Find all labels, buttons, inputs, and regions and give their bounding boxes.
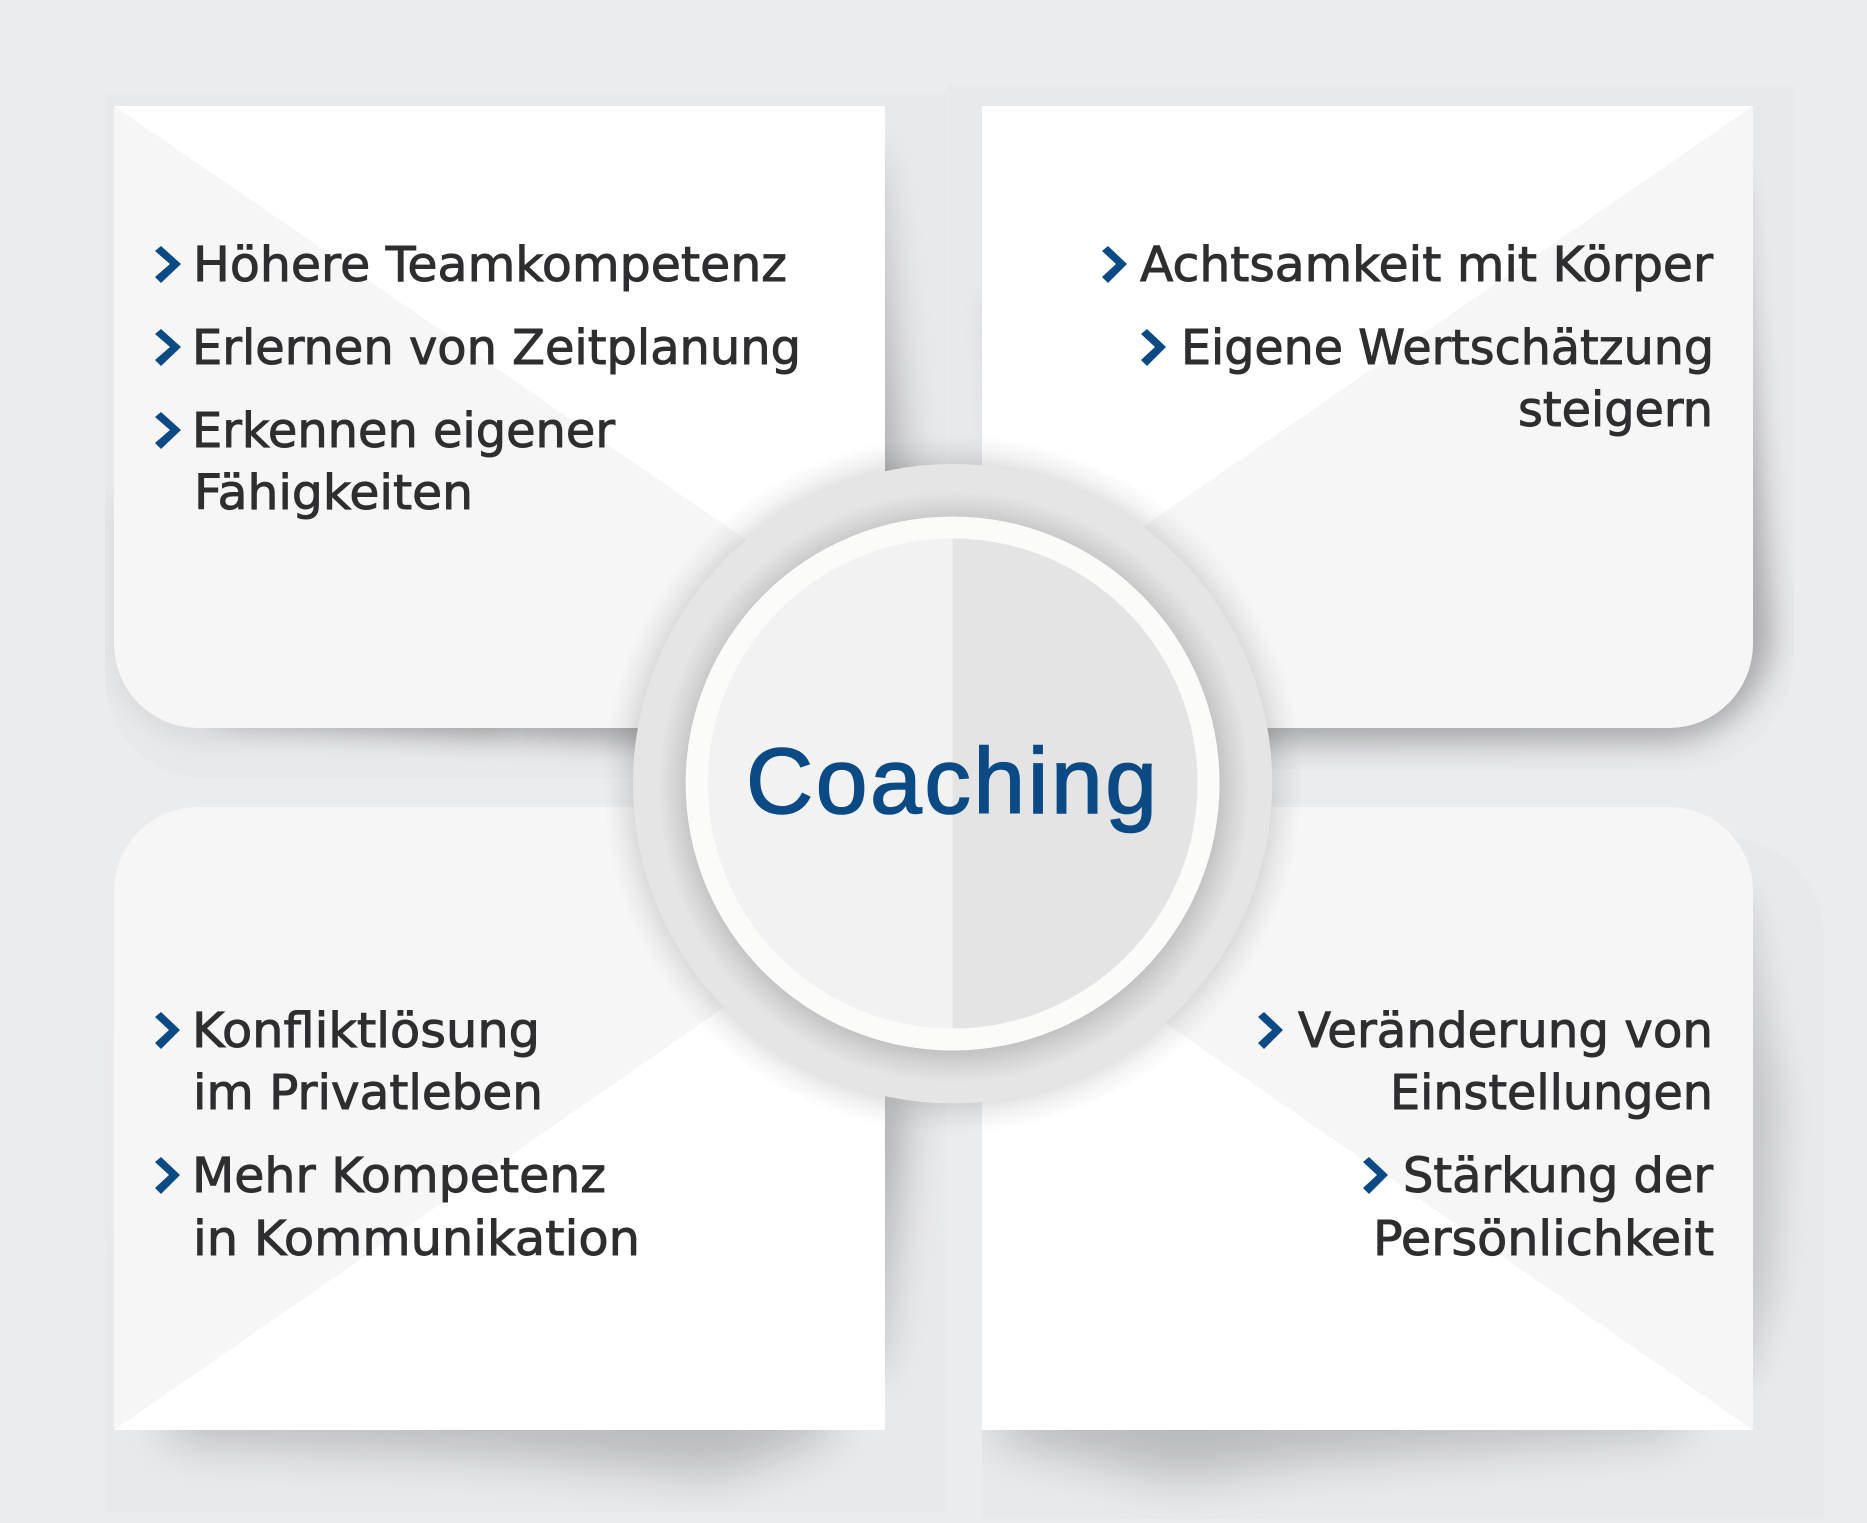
list item: Eigene Wertschätzung steigern: steigern	[1518, 382, 1713, 438]
central circle	[603, 434, 1303, 1134]
list item: Veränderung von Einstellungen: Veränderung von	[1298, 1003, 1713, 1059]
card shape top right	[982, 106, 1753, 728]
panel: top right	[982, 106, 1753, 728]
list item: Eigene Wertschätzung steigern	[1141, 320, 1714, 438]
inner disc left half	[708, 538, 952, 1028]
list item: Eigene Wertschätzung steigern: Eigene Wertschätzung	[1181, 320, 1714, 376]
list item: Stärkung der Persönlichkeit: Stärkung der	[1403, 1148, 1713, 1204]
list item: Konfliktlösung im Privatleben: im Privatleben	[193, 1065, 543, 1121]
circle outer glow	[603, 434, 1303, 1134]
list item: Erlernen von Zeitplanung: Erlernen von Zeitplanung	[192, 320, 801, 376]
list item: Mehr Kompetenz in Kommunikation: Mehr Kompetenz	[192, 1148, 606, 1204]
list item: Achtsamkeit mit Körper: Achtsamkeit mit Körper	[1140, 237, 1713, 293]
list item: Erkennen eigener Fähigkeiten	[155, 403, 615, 521]
card shape top left	[114, 106, 885, 728]
title: Coaching	[746, 729, 1157, 833]
panel: top left	[114, 106, 885, 728]
white diagonal facet bottom left	[114, 896, 885, 1430]
white diagonal facet top right	[982, 106, 1753, 638]
list item: Höhere Teamkompetenz: Höhere Teamkompetenz	[193, 237, 787, 293]
list item: Konfliktlösung im Privatleben	[155, 1003, 543, 1121]
white diagonal facet bottom right	[982, 896, 1753, 1430]
list item: Mehr Kompetenz in Kommunikation: in Kommunikation	[193, 1211, 640, 1267]
list item: Erkennen eigener Fähigkeiten: Fähigkeiten	[194, 465, 473, 521]
ring inner shadow	[658, 491, 1250, 1083]
list item: Veränderung von Einstellungen	[1258, 1003, 1713, 1121]
panel: bottom left	[114, 807, 885, 1430]
card shape bottom right	[982, 807, 1753, 1430]
card shape bottom left	[114, 807, 885, 1430]
inner disc right half	[952, 538, 1198, 1028]
list item: Veränderung von Einstellungen: Einstellungen	[1390, 1065, 1713, 1121]
list item: Konfliktlösung im Privatleben: Konfliktlösung	[192, 1003, 540, 1059]
list item: Stärkung der Persönlichkeit: Persönlichkeit	[1373, 1211, 1714, 1267]
list item: Stärkung der Persönlichkeit	[1363, 1148, 1714, 1267]
list item: Mehr Kompetenz in Kommunikation	[155, 1148, 640, 1267]
white ring	[686, 516, 1220, 1050]
white diagonal facet top left	[114, 106, 885, 635]
outer ring	[633, 464, 1272, 1103]
panel: bottom right	[982, 807, 1753, 1430]
list item: Erkennen eigener Fähigkeiten: Erkennen eigener	[192, 403, 615, 459]
